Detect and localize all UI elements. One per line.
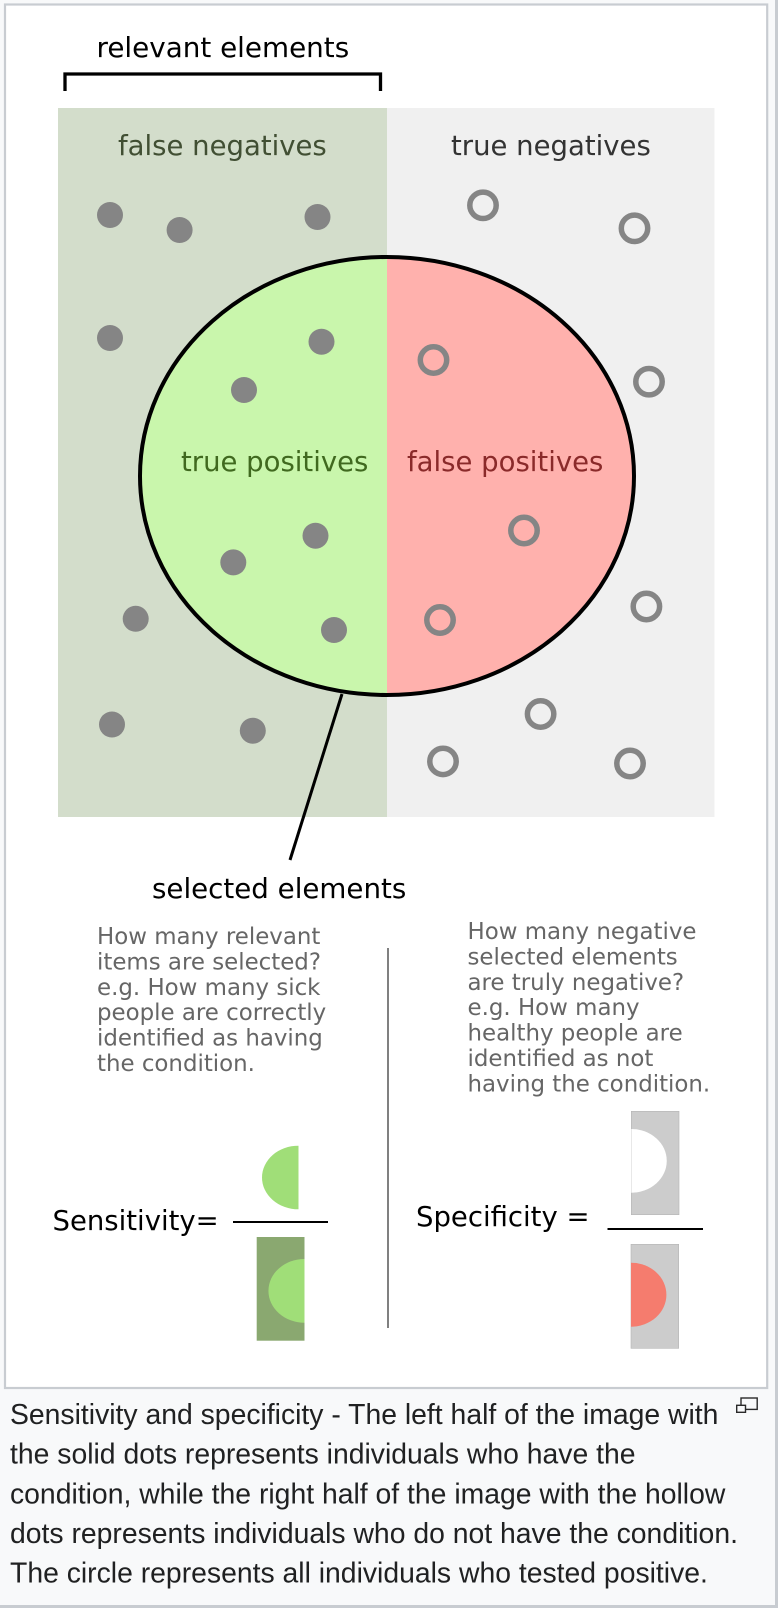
selected circle: false positives half xyxy=(387,257,634,695)
panel: false negatives background xyxy=(58,108,387,817)
text block: specificity explanation: having the condition. xyxy=(468,1071,710,1097)
text block: specificity explanation: How many negative xyxy=(468,919,696,945)
caption text: Sensitivity and specificity - The left half of the image with xyxy=(10,1399,718,1431)
formula: specificity xyxy=(416,1111,703,1348)
heading: relevant elements: relevant elements xyxy=(96,31,349,64)
text block: sensitivity explanation: identified as having xyxy=(97,1026,323,1052)
formula: sensitivity xyxy=(52,1146,328,1341)
denominator: relevant rectangle xyxy=(257,1237,304,1341)
text block: specificity explanation: healthy people are xyxy=(468,1021,683,1047)
label: true negatives: true negatives xyxy=(451,130,651,162)
icon: enlarge image xyxy=(737,1398,757,1412)
text block: specificity explanation: identified as not xyxy=(468,1046,653,1072)
text block: sensitivity explanation: e.g. How many sick xyxy=(97,975,321,1001)
text block: sensitivity explanation: How many relevant xyxy=(97,924,320,950)
vertical divider xyxy=(387,948,389,1328)
label: Specificity =: Specificity = xyxy=(416,1201,590,1233)
caption text: The circle represents all individuals who tested positive. xyxy=(10,1558,708,1590)
text block: sensitivity explanation: the condition. xyxy=(97,1051,255,1077)
caption text: dots represents individuals who do not have the condition. xyxy=(10,1518,738,1550)
label: true positives: true positives xyxy=(181,446,368,478)
bracket: relevant elements xyxy=(65,74,380,91)
text block: specificity explanation: selected elements xyxy=(468,944,678,970)
label: Sensitivity=: Sensitivity= xyxy=(52,1205,219,1237)
selected circle outline xyxy=(140,257,634,695)
text block: sensitivity explanation: people are correctly xyxy=(97,1000,326,1026)
numerator: negatives rectangle xyxy=(631,1111,679,1215)
numerator: white half circle xyxy=(631,1129,667,1193)
panel: true negatives background xyxy=(387,108,714,817)
numerator: true positives half circle xyxy=(262,1146,298,1209)
denominator: false positives half circle xyxy=(631,1263,666,1327)
pointer line to selected elements xyxy=(290,694,342,860)
denominator: negatives rectangle xyxy=(631,1244,679,1348)
text block: specificity explanation: e.g. How many xyxy=(468,995,640,1021)
selected circle: true positives half xyxy=(140,257,387,695)
caption text: condition, while the right half of the image with the hollow xyxy=(10,1478,726,1510)
fraction line xyxy=(608,1228,703,1230)
label: false positives: false positives xyxy=(407,446,603,478)
text block: specificity explanation: are truly negative? xyxy=(468,970,684,996)
hollow dots: individuals without the condition xyxy=(420,192,662,777)
denominator: true positives half circle xyxy=(268,1259,304,1323)
caption text: the solid dots represents individuals who have the xyxy=(10,1438,636,1470)
label: selected elements: selected elements xyxy=(152,872,406,905)
text block: sensitivity explanation: items are selected? xyxy=(97,949,321,975)
label: false negatives: false negatives xyxy=(118,130,327,162)
fraction line xyxy=(233,1221,328,1223)
solid dots: individuals with the condition xyxy=(97,202,347,744)
